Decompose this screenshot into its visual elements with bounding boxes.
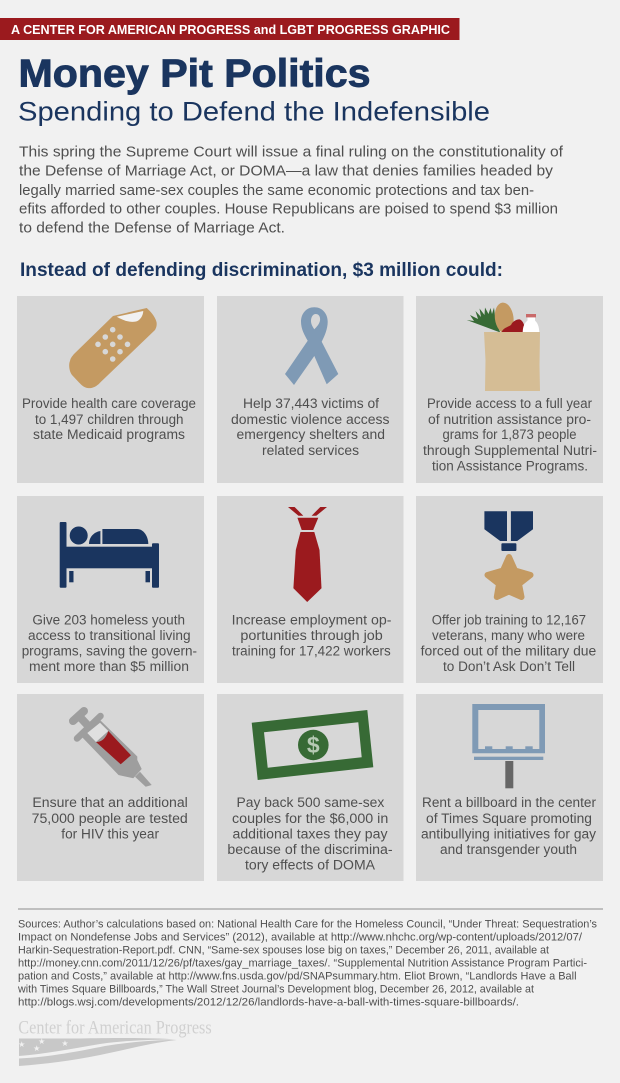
panel: tax payback — [217, 694, 404, 881]
text: tax payback: additional taxes they pay — [232, 826, 388, 842]
text: nutrition assistance: through Supplemental Nutri- — [423, 443, 597, 458]
text: employment — [232, 612, 392, 658]
text: veterans: to Don’t Ask Don’t Tell — [443, 659, 575, 674]
text: HIV testing: for HIV this year — [61, 826, 160, 842]
sources text: Harkin-Sequestration-Report.pdf. CNN, “Same-sex spouses lose big on taxes,” December 26, 2011, available at — [18, 944, 549, 956]
panel: nutrition assistance — [416, 296, 603, 483]
icon: grocery bag — [467, 301, 540, 391]
title: Money Pit Politics — [18, 53, 370, 96]
logo: Center for American Progress: ★ — [33, 1044, 40, 1053]
text: veterans: Offer job training to 12,167 — [432, 612, 586, 628]
text: billboard: and transgender youth — [440, 842, 577, 857]
text: billboard — [421, 795, 597, 857]
sources text: with Times Square Billboards,” The Wall Street Journal’s Development blog, December 26, 2012, available at — [17, 984, 534, 996]
panel: veterans — [416, 496, 603, 683]
text: tax payback: tory effects of DOMA — [245, 858, 375, 872]
text: employment: Increase employment op- — [232, 612, 392, 628]
icon: dollar bill — [252, 710, 373, 780]
text: nutrition assistance: grams for 1,873 people — [442, 427, 576, 442]
intro paragraph — [19, 145, 564, 237]
panel: homeless youth — [17, 496, 204, 683]
text: homeless youth: programs, saving the govern- — [22, 644, 197, 658]
sources text: Sources: Author’s calculations based on: National Health Care for the Homeless Council, “Under Threat: Sequestration’s — [18, 918, 597, 930]
icon: medal — [484, 511, 533, 597]
text: HIV testing: Ensure that an additional — [32, 795, 188, 810]
text: HIV testing: 75,000 people are tested — [32, 811, 188, 826]
text: billboard: antibullying initiatives for gay — [421, 826, 596, 842]
banner: credit line: A CENTER FOR AMERICAN PROGRESS and LGBT PROGRESS GRAPHIC — [11, 23, 450, 37]
intro paragraph: This spring the Supreme Court will issue a final ruling on the constitutionality of — [19, 145, 564, 161]
text: homeless youth: ment more than $5 million — [29, 659, 189, 674]
text: domestic violence: related services — [262, 443, 359, 458]
intro paragraph: efits afforded to other couples. House Republicans are poised to spend $3 million — [19, 202, 558, 218]
text: homeless youth: access to transitional living — [28, 628, 191, 643]
sources text: pation and Costs,” available at http://www.fns.usda.gov/pd/SNAPsummary.htm. Eliot Brown, “Landlords Have a Ball — [18, 970, 576, 982]
panel: domestic violence — [217, 296, 404, 483]
sources text: http://money.cnn.com/2011/12/26/pf/taxes/gay_marriage_taxes/. “Supplemental Nutrition Assistance Program Partici- — [18, 958, 587, 970]
panel: employment — [217, 496, 404, 683]
panel: HIV testing — [17, 694, 204, 881]
banner: credit line — [0, 18, 460, 40]
text: nutrition assistance: Provide access to a full year — [427, 396, 592, 411]
text: billboard: of Times Square promoting — [426, 811, 592, 826]
text: domestic violence — [231, 396, 390, 458]
icon: bandage — [69, 308, 157, 388]
text: veterans: forced out of the military due — [421, 644, 596, 658]
intro paragraph: to defend the Defense of Marriage Act. — [19, 221, 285, 237]
text: tax payback: couples for the $6,000 in — [232, 811, 388, 826]
panel: health care — [17, 296, 204, 483]
logo: Center for American Progress: ★ — [38, 1037, 45, 1046]
text: nutrition assistance: tion Assistance Programs. — [432, 458, 588, 474]
text: health care: to 1,497 children through — [35, 412, 184, 427]
text: veterans: veterans, many who were — [432, 628, 585, 643]
intro paragraph: legally married same-sex couples the same economic protections and tax ben- — [19, 183, 534, 199]
text: employment: training for 17,422 workers — [232, 644, 391, 658]
text: billboard: Rent a billboard in the center — [422, 795, 597, 810]
logo: Center for American Progress: ★ — [61, 1039, 69, 1048]
text: homeless youth — [22, 612, 197, 674]
text: homeless youth: Give 203 homeless youth — [32, 612, 185, 628]
sources text — [17, 918, 597, 1008]
text: nutrition assistance — [423, 396, 597, 474]
intro paragraph: the Defense of Marriage Act, or DOMA—a law that denies families headed by — [19, 164, 554, 180]
section heading: Instead of defending discrimination, $3 million could: — [20, 259, 503, 281]
sources text: Impact on Nondefense Jobs and Services” (2012), available at http://www.nhchc.org/wp-content/uploads/2012/07/ — [18, 932, 583, 944]
text: domestic violence: domestic violence access — [231, 412, 390, 427]
icon: bed — [60, 522, 159, 588]
text: health care — [22, 396, 196, 442]
text: HIV testing — [32, 795, 188, 842]
icon: dollar bill: $ — [307, 732, 320, 758]
icon: billboard — [472, 704, 545, 788]
text: tax payback: Pay back 500 same-sex — [236, 795, 385, 810]
panel: billboard — [416, 694, 603, 881]
logo: Center for American Progress: Center for American Progress — [18, 1018, 212, 1038]
text: tax payback — [227, 795, 393, 872]
subtitle: Spending to Defend the Indefensible — [18, 97, 490, 127]
text: tax payback: because of the discrimina- — [227, 842, 393, 857]
text: domestic violence: emergency shelters and — [236, 427, 385, 442]
logo: Center for American Progress — [18, 1018, 212, 1066]
icon: necktie — [288, 507, 327, 602]
text: health care: state Medicaid programs — [33, 427, 185, 442]
text: health care: Provide health care coverage — [22, 396, 196, 411]
text: employment: portunities through job — [240, 628, 383, 643]
icon: syringe — [73, 711, 152, 787]
logo: Center for American Progress: ★ — [18, 1040, 25, 1049]
text: veterans — [421, 612, 596, 674]
sources text: http://blogs.wsj.com/developments/2012/12/26/landlords-have-a-ball-with-times-square-billboards/. — [18, 996, 519, 1008]
icon: awareness ribbon — [285, 307, 338, 385]
text: nutrition assistance: of nutrition assistance pro- — [428, 412, 591, 427]
text: domestic violence: Help 37,443 victims of — [243, 396, 379, 411]
